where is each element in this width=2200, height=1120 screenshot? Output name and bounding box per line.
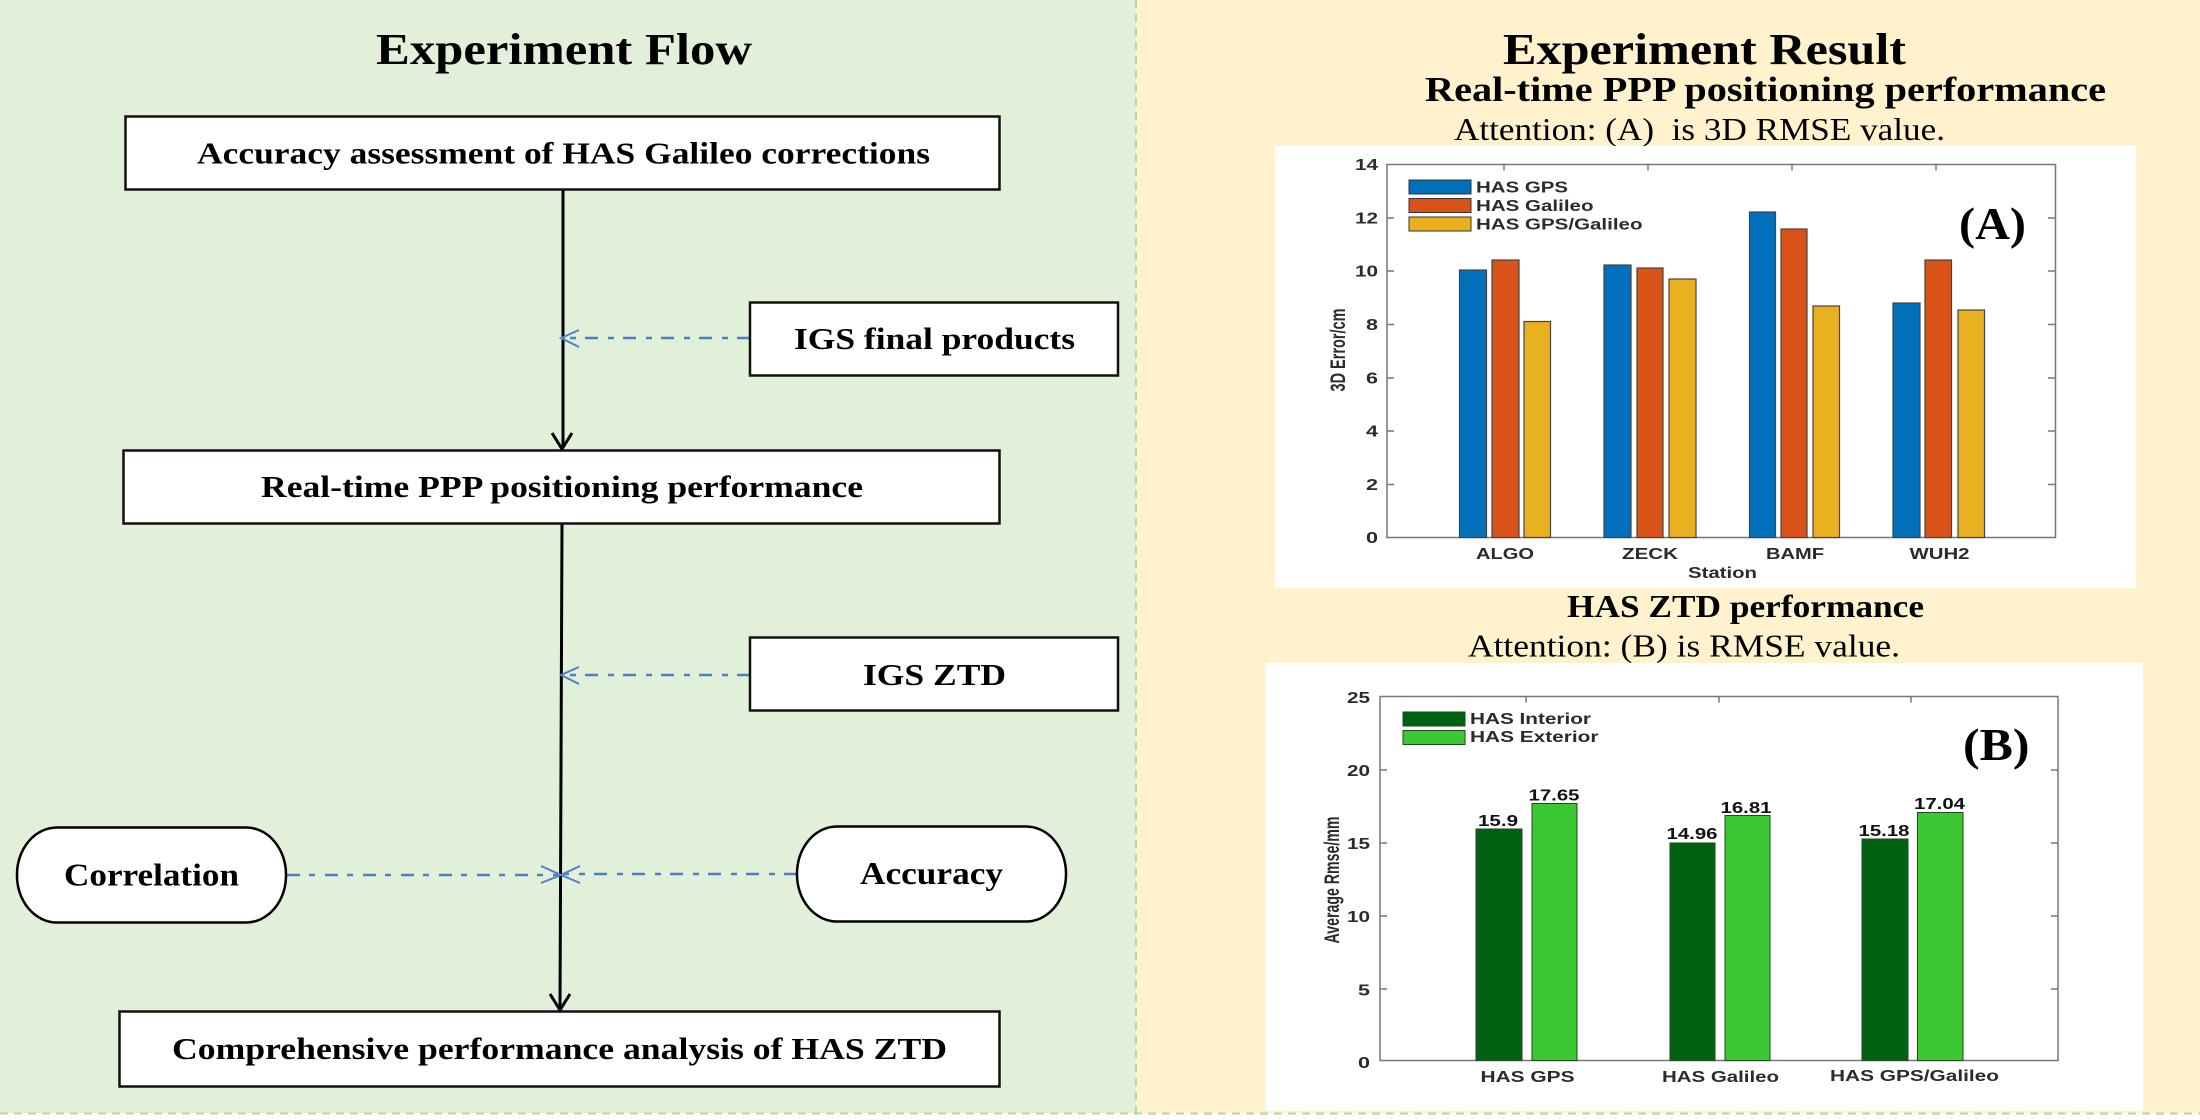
x axis labels: WUH2: [1910, 546, 1970, 563]
rounded box: accuracy: [797, 826, 1066, 922]
chart B: average RMSE: [1266, 663, 2143, 1111]
legend: HAS GPS/Galileo: [1476, 216, 1642, 234]
heading: experiment result: Experiment Result: [1503, 25, 1906, 74]
flow box: real-time PPP positioning performance: Real-time PPP positioning performance: [261, 469, 863, 504]
y axis labels: [1347, 690, 1371, 1072]
legend: HAS GPS: [1476, 180, 1568, 196]
dashed arrow: accuracy: [561, 866, 797, 883]
x axis labels: ALGO: [1476, 546, 1534, 563]
dashed arrow: IGS final products: [561, 330, 750, 347]
bars: HAS Galileo: [1670, 816, 1770, 1060]
chart tag B: (B): [1963, 719, 2030, 770]
flow box: comprehensive performance analysis: Comprehensive performance analysis of HAS ZTD: [172, 1031, 947, 1066]
y axis labels: 0: [1358, 1055, 1370, 1072]
y axis title: Average Rmse/mm: [1319, 816, 1344, 944]
y axis labels: 12: [1355, 210, 1378, 228]
y axis labels: 10: [1355, 264, 1378, 280]
bar value labels: 15.18: [1858, 823, 1910, 840]
y axis labels: 8: [1366, 317, 1379, 334]
legend: HAS Galileo: [1476, 198, 1594, 215]
chart A: 3D error by station: [1275, 146, 2136, 588]
input box: IGS final products: [750, 302, 1118, 376]
bars: WUH2: [1893, 260, 1984, 538]
y axis labels: 25: [1347, 690, 1370, 707]
x axis labels: HAS GPS: [1480, 1069, 1574, 1086]
dashed arrow: correlation: [287, 866, 561, 883]
y axis labels: 20: [1347, 763, 1370, 780]
bars: ZECK: [1604, 265, 1696, 538]
flow box: accuracy assessment: Accuracy assessment of HAS Galileo corrections: [197, 136, 930, 170]
rounded box: accuracy: Accuracy: [860, 855, 1003, 891]
bar value labels: 17.04: [1914, 796, 1965, 813]
x axis labels: [1480, 1068, 1999, 1086]
note: attention B: Attention: (B) is RMSE value.: [1468, 628, 1900, 664]
bars: BAMF: [1750, 212, 1840, 538]
y axis labels: [1355, 157, 1379, 547]
y axis labels: 0: [1366, 530, 1378, 547]
legend: HAS Exterior: [1470, 729, 1598, 746]
subheading: real-time PPP positioning performance: Real-time PPP positioning performance: [1425, 70, 2106, 109]
plot frame and ticks: [1387, 164, 2056, 538]
y axis labels: 10: [1347, 909, 1370, 926]
panel: experiment flow: [0, 0, 1136, 1113]
x axis labels: BAMF: [1766, 546, 1824, 563]
chart tag A: (A): [1959, 198, 2026, 249]
bar value labels: 15.9: [1478, 813, 1518, 830]
input box: IGS ZTD: [750, 638, 1118, 710]
y axis labels: 14: [1355, 157, 1378, 174]
note: attention A: Attention: (A) is 3D RMSE value.: [1454, 111, 1945, 147]
subheading: HAS ZTD performance: HAS ZTD performance: [1567, 588, 1924, 624]
bar value labels: [1478, 788, 1965, 843]
x axis title: Station: [1688, 565, 1757, 582]
flow box: accuracy assessment: [126, 116, 1000, 190]
x axis labels: [1476, 546, 1970, 563]
y axis labels: 6: [1366, 370, 1379, 388]
y axis labels: 15: [1347, 836, 1370, 853]
flow box: real-time PPP positioning performance: [124, 450, 1000, 524]
bars: HAS GPS: [1476, 804, 1577, 1060]
bar value labels: 16.81: [1720, 800, 1772, 817]
dashed arrow: IGS ZTD: [561, 667, 750, 684]
arrow: positioning performance to comprehensive analysis: [550, 522, 570, 1010]
rounded box: correlation: [17, 828, 286, 922]
bar value labels: 17.65: [1528, 788, 1580, 804]
input box: IGS final products: IGS final products: [794, 321, 1075, 356]
rounded box: correlation: Correlation: [64, 856, 239, 892]
bars: HAS GPS/Galileo: [1862, 812, 1963, 1060]
x axis labels: HAS GPS/Galileo: [1830, 1068, 1999, 1085]
x axis labels: HAS Galileo: [1662, 1069, 1779, 1086]
x axis labels: ZECK: [1622, 546, 1679, 563]
plot frame and ticks: [1380, 696, 2058, 1060]
arrow: accuracy assessment to positioning performance: [552, 188, 572, 449]
y axis labels: 2: [1366, 477, 1378, 494]
y axis labels: 4: [1366, 424, 1379, 440]
legend: [1403, 711, 1598, 746]
bar value labels: 14.96: [1666, 826, 1718, 843]
input box: IGS ZTD: IGS ZTD: [863, 657, 1006, 692]
heading: experiment flow: Experiment Flow: [376, 25, 752, 74]
flow box: comprehensive performance analysis: [120, 1012, 1000, 1086]
bars: ALGO: [1460, 260, 1550, 538]
y axis title: 3D Error/cm: [1325, 308, 1350, 392]
legend: HAS Interior: [1470, 711, 1591, 728]
legend: [1409, 180, 1642, 234]
y axis labels: 5: [1358, 982, 1371, 1000]
